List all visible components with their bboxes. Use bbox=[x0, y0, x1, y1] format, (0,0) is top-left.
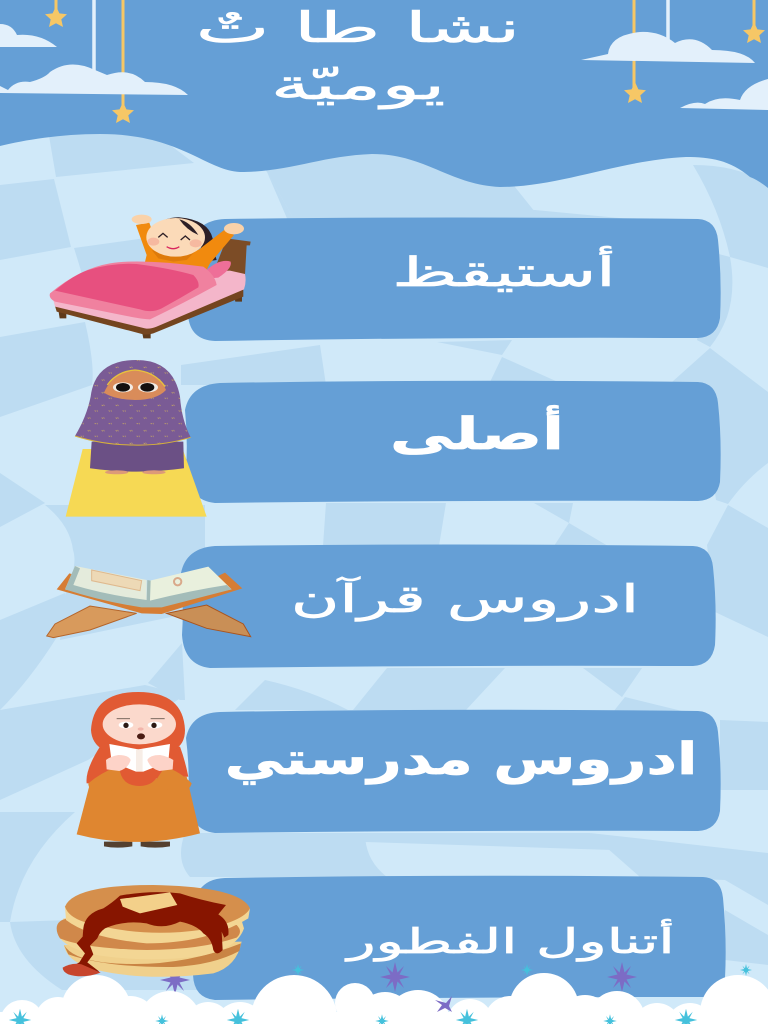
child hair bbox=[150, 217, 217, 262]
title bbox=[196, 3, 520, 109]
icon: girl reading a book bbox=[77, 692, 200, 848]
icon: clouds bbox=[0, 24, 768, 110]
title: يوميّة bbox=[271, 60, 445, 109]
icon: stars bbox=[45, 6, 765, 123]
icon: child waking in bed bbox=[50, 215, 251, 338]
panel: pray bbox=[185, 381, 721, 503]
hanging strings bbox=[56, 0, 754, 105]
title: نشا طا تٌ bbox=[196, 3, 520, 52]
bottom clouds bbox=[0, 973, 768, 1024]
bursts on clouds bbox=[9, 996, 697, 1024]
blanket bbox=[50, 261, 217, 319]
bottom bursts behind clouds bbox=[160, 962, 752, 995]
panel: school lessons: ادروس مدرستي bbox=[225, 734, 697, 785]
icon: Quran on stand bbox=[47, 566, 251, 638]
panel: wake up: أستيقظ bbox=[392, 246, 616, 296]
panel: breakfast: أتناول الفطور bbox=[345, 919, 675, 962]
icon: pancakes bbox=[57, 885, 250, 977]
panel: breakfast bbox=[193, 876, 726, 1000]
panel: wake up bbox=[188, 218, 721, 341]
panel: school lessons bbox=[186, 710, 721, 833]
panel: study Quran bbox=[181, 544, 716, 668]
panel: study Quran: ادروس قرآن bbox=[291, 576, 639, 621]
child body bbox=[136, 223, 234, 275]
header banner bbox=[0, 0, 768, 188]
panel: pray: أصلى bbox=[390, 405, 564, 459]
icon: girl praying on mat bbox=[66, 360, 207, 517]
